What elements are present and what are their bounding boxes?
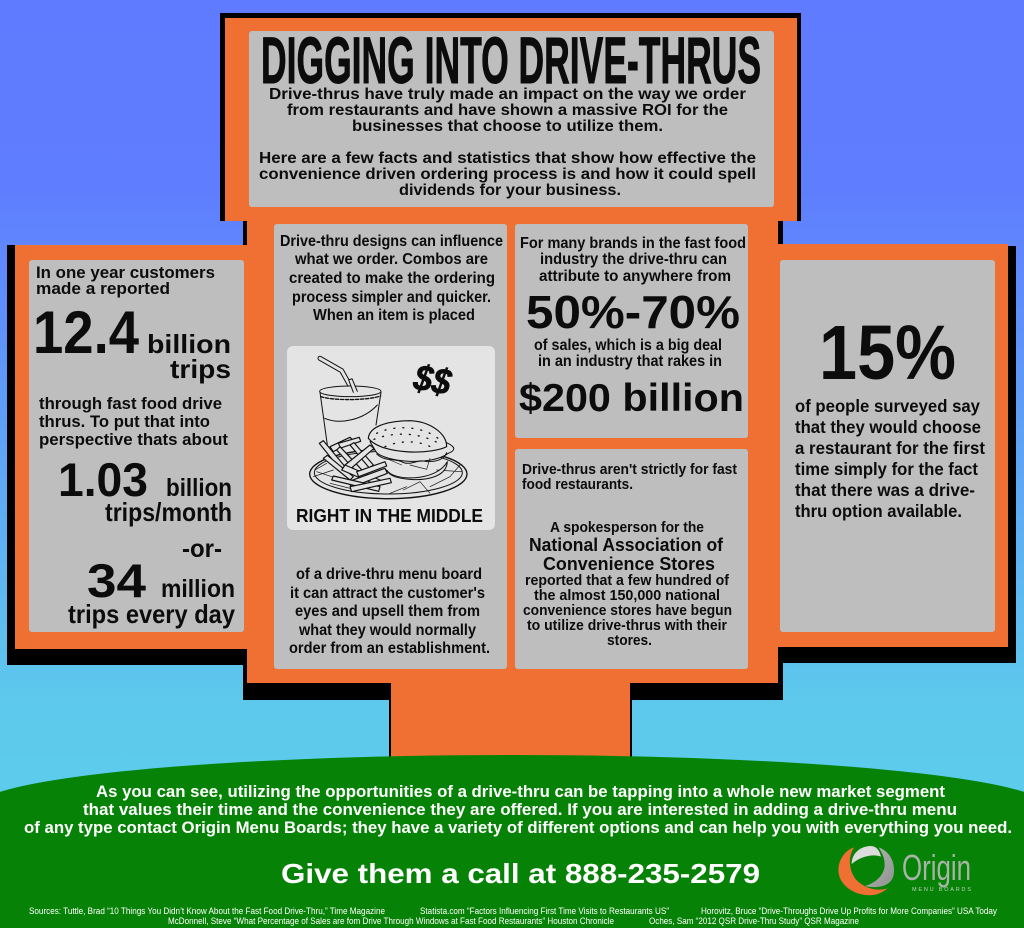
stat: 50%-70%: 50%-70% xyxy=(526,286,740,338)
panel: left trips statistics: made a reported xyxy=(36,280,170,298)
logo wordmark: Origin xyxy=(902,847,971,888)
introduction text: Drive-thrus have truly made an impact on the way we order xyxy=(269,86,746,103)
stat: 34 million trips every day: million xyxy=(161,575,235,603)
panel: convenience stores: convenience stores have begun xyxy=(523,602,732,619)
panel: convenience stores: reported that a few hundred of xyxy=(525,572,730,589)
introduction text: Here are a few facts and statistics that show how effective the xyxy=(259,150,756,167)
text: drive-thru designs: what we order. Combos are xyxy=(294,251,488,268)
stat: 34 million trips every day xyxy=(68,554,235,629)
panel: left trips statistics: thrus. To put that into xyxy=(39,412,210,431)
panel: share of sales: industry the drive-thru can xyxy=(540,251,727,268)
icon: dollar signs: $$ xyxy=(410,356,455,403)
stat: 1.03 billion trips per month: 1.03 xyxy=(58,453,148,506)
caption: right in the middle: RIGHT IN THE MIDDLE xyxy=(296,506,483,526)
panel: left trips statistics: -or- xyxy=(182,535,222,563)
stat: 34 million trips every day: trips every day xyxy=(68,599,235,629)
closing paragraph: As you can see, utilizing the opportunities of a drive-thru can be tapping into a whole new market segment xyxy=(96,782,945,801)
text: menu board upsell: order from an establishment. xyxy=(289,640,490,657)
stat: 1.03 billion trips per month: trips/month xyxy=(105,497,232,527)
closing paragraph: of any type contact Origin Menu Boards; they have a variety of different options and can help you with everything you need. xyxy=(24,818,1012,837)
panel: left trips statistics: perspective thats about xyxy=(39,430,228,449)
text: survey result: time simply for the fact xyxy=(795,459,978,479)
text: menu board upsell: what they would normally xyxy=(298,622,476,639)
text: drive-thru designs: Drive-thru designs can influence xyxy=(280,233,503,250)
highlighted organisation name: National Association of xyxy=(529,535,724,555)
panel: convenience stores: food restaurants. xyxy=(522,476,633,493)
icon: drink, burger and fries xyxy=(310,358,467,499)
stat: 12.4 billion trips xyxy=(33,299,231,384)
introduction text xyxy=(259,86,756,199)
stat: 12.4 billion trips: 12.4 xyxy=(33,299,140,366)
stat: 1.03 billion trips per month: billion xyxy=(166,474,232,502)
panel: share of sales xyxy=(515,224,748,438)
closing paragraph xyxy=(24,782,1012,837)
panel: convenience stores: A spokesperson for the xyxy=(550,519,704,536)
highlighted organisation name xyxy=(529,535,724,574)
panel: left trips statistics xyxy=(29,260,244,632)
panel: convenience stores xyxy=(515,449,748,669)
text: survey result: that there was a drive- xyxy=(795,480,975,500)
introduction text: from restaurants and have shown a massive ROI for the xyxy=(287,102,728,119)
text: menu board upsell: eyes and upsell them from xyxy=(295,603,480,620)
text: survey result xyxy=(795,396,985,521)
panel: convenience stores: stores. xyxy=(607,632,652,649)
logo: Origin Menu Boards xyxy=(838,846,971,895)
text: survey result: of people surveyed say xyxy=(795,396,980,416)
sources xyxy=(29,906,997,926)
panel: left trips statistics: In one year customers xyxy=(36,264,215,282)
panel: share of sales: For many brands in the fast food xyxy=(520,235,746,252)
text: menu board upsell: it can attract the customer's xyxy=(290,585,485,602)
panel: right 15% statistic xyxy=(780,260,995,632)
icon: logo swirl xyxy=(838,846,894,895)
panel: menu board placement xyxy=(274,224,507,669)
text: drive-thru designs: When an item is placed xyxy=(313,307,475,324)
call to action: phone number: Give them a call at 888-235-2579 xyxy=(281,858,760,889)
panel: convenience stores: the almost 150,000 national xyxy=(534,587,720,604)
highlighted organisation name: Convenience Stores xyxy=(543,554,715,574)
introduction text: dividends for your business. xyxy=(399,182,621,199)
stat: 12.4 billion trips: trips xyxy=(170,354,231,384)
text: survey result: a restaurant for the first xyxy=(795,438,985,458)
sign structure xyxy=(7,13,1016,763)
stat: $200 billion: $200 billion xyxy=(519,377,744,420)
panel: convenience stores: to utilize drive-thrus with their xyxy=(527,617,727,634)
introduction text: businesses that choose to utilize them. xyxy=(352,118,663,135)
panel: share of sales: of sales, which is a big deal xyxy=(534,337,722,354)
closing paragraph: that values their time and the convenience they are offered. If you are interested in adding a drive-thru menu xyxy=(83,800,957,819)
stat: 34 million trips every day: 34 xyxy=(87,554,146,607)
sources: Sources: Tuttle, Brad “10 Things You Didn’t Know About the Fast Food Drive-Thru,” Time Magazine xyxy=(29,906,385,916)
panel: left trips statistics: through fast food drive xyxy=(39,394,222,413)
stat: 12.4 billion trips: billion xyxy=(147,329,231,359)
sources: Oches, Sam “2012 QSR Drive-Thru Study” QSR Magazine xyxy=(649,916,859,926)
text: survey result: that they would choose xyxy=(795,417,981,437)
panel: share of sales: attribute to anywhere from xyxy=(539,268,731,285)
panel: green hill footer xyxy=(0,755,1024,928)
text: drive-thru designs xyxy=(280,233,503,324)
text: drive-thru designs: process simpler and quicker. xyxy=(292,289,491,306)
panel: convenience stores: Drive-thrus aren't strictly for fast xyxy=(522,461,737,478)
stat: 15%: 15% xyxy=(819,310,956,396)
logo tagline: MENU BOARDS xyxy=(912,887,971,893)
panel: title and introduction xyxy=(249,23,774,207)
text: drive-thru designs: created to make the ordering xyxy=(289,270,495,287)
text: menu board upsell xyxy=(289,566,490,657)
text: survey result: thru option available. xyxy=(795,501,962,521)
introduction text: convenience driven ordering process is and how it could spell xyxy=(259,166,756,183)
sources: McDonnell, Steve “What Percentage of Sales are fom Drive Through Windows at Fast Food Restaurants” Houston Chronicle xyxy=(168,916,614,926)
illustration card: food tray xyxy=(287,346,495,530)
stat: 1.03 billion trips per month xyxy=(58,453,232,527)
sources: Statista.com “Factors Influencing First Time Visits to Restaurants US” xyxy=(420,906,669,916)
panel: share of sales: in an industry that rakes in xyxy=(538,353,722,370)
text: menu board upsell: of a drive-thru menu board xyxy=(296,566,482,583)
sources: Horovitz, Bruce “Drive-Throughs Drive Up Profits for More Companies” USA Today xyxy=(701,906,997,916)
